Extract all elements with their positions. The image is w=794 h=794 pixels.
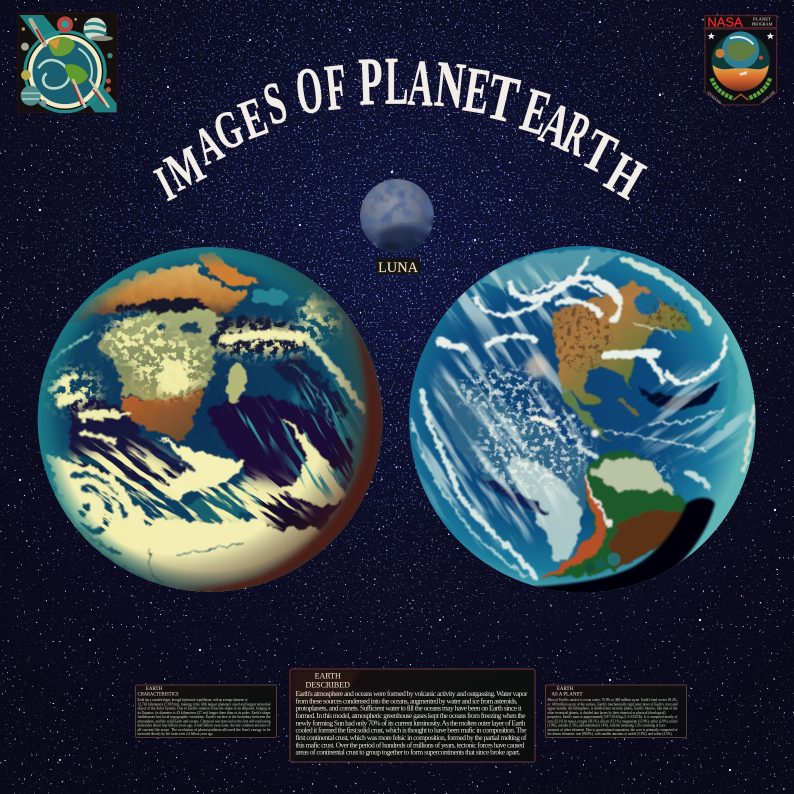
dark ocean south east [527,498,715,600]
title: images of planet earth: E [459,54,495,128]
dark limb shading [38,247,382,592]
body: earth described: protoplanets, and comets. Sufficient water to fill the oceans may have been on Earth since it [296,704,522,713]
title: images of planet earth: T [573,116,626,186]
panel: earth described [290,669,535,762]
body: earth as a planet [548,697,678,737]
body: earth characteristics: all current life arose. The evolution of photosynthesis allowed the Sun's energy to be [138,727,271,732]
heading: earth described [305,672,350,690]
body: earth characteristics: 12,742 kilometers (7,918 mi), making it the fifth largest planetary sized and largest terrestrial [138,701,271,707]
body: earth described: this mafic crust. Over the period of hundreds of millions of years, tectonic forces have caused [296,740,525,749]
globe surface [43,253,353,595]
body: earth characteristics: harvested directly by life forms over 2.4 billion years ago. [138,731,214,736]
body: earth described: areas of continental crust to group together to form supercontinents that since broke apart. [296,748,521,757]
title: images of planet earth: G [205,98,251,162]
badge header [705,15,777,29]
moon label: luna: LUNA [378,260,418,276]
moon [360,179,434,255]
badge header: PROGRAM [752,22,772,27]
rockets [31,20,108,107]
shield: ANALYSIS [706,90,722,105]
badge header: NASA [707,15,743,29]
body: earth as a planet: amounts of other elements. Due to gravitational separation, the core is primarily composed of [548,727,678,733]
title: images of planet earth: S [257,69,293,138]
right globe: americas [409,246,756,593]
title: images of planet earth [147,43,655,212]
body: earth characteristics: object of the Solar System. Due to Earth's rotation it has the shape of an ellipsoid, bulging at [138,706,271,712]
heading: earth as a planet: AS A PLANET [551,692,583,698]
ring and earth [25,32,105,112]
title: images of planet earth: A [407,47,435,121]
panel: earth characteristics [136,685,276,738]
dark swirl stripes [73,456,243,583]
shield: EXPLORE [761,89,777,104]
body: earth characteristics [138,697,271,736]
body: earth as a planet: upper mantle, the lithosphere, is divided into tectonic plates. Earth's interior, like that of the [548,706,678,712]
body: earth described: newly forming Sun had only 70% of its current luminosity. As the molten outer layer of Earth [296,718,526,727]
teal limb glow [38,247,382,592]
title: images of planet earth: M [157,134,213,202]
body: earth described: formed. In this model, atmospheric greenhouse gases kept the oceans from freezing when the [296,711,526,720]
heading: earth described: EARTH [315,672,341,680]
heading: earth as a planet: EARTH [557,687,574,692]
body: earth characteristics: its Equator; its diameter is 43 kilometers (27 mi) longer there than at its poles. Earth's shape [138,710,271,715]
title: images of planet earth: E [514,75,558,149]
title: images of planet earth: P [357,44,384,119]
body: earth described: from these sources condensed into the oceans, augmented by water and ice from asteroids, [296,696,518,705]
body: earth characteristics: furthermore has local topographic variations. Earth's surface is the boundary between the [138,714,271,719]
body: earth as a planet: properties. Earth's mass is approximately 5.97×1024 kg (1.3×1025 lb). It is composed mostly of [548,714,678,719]
badge header: PLANET [753,17,771,22]
nasa planet program badge [705,15,777,105]
title: images of planet earth: F [322,50,350,125]
heading: earth characteristics [138,687,179,698]
title: images of planet earth: H [596,140,655,211]
title: images of planet earth: A [532,89,580,161]
left mission badge [18,13,117,112]
body: earth described: cooled it formed the first solid crust, which is thought to have been mafic in composition. The [296,726,527,735]
title: images of planet earth: I [147,157,184,212]
pale texture layers [412,258,590,552]
planets [21,16,113,107]
title: images of planet earth: E [232,87,275,152]
white cloud swirls [412,260,753,577]
title: images of planet earth: L [385,43,408,119]
land masses [540,280,697,581]
heading: earth characteristics: CHARACTERISTICS [138,692,179,698]
body: earth characteristics: atmosphere, and the solid Earth and oceans. Chemical reactions led to the first self-replicating [138,718,270,724]
heading: earth characteristics: EARTH [146,687,163,692]
left globe: africa stylised [38,247,382,592]
body: earth described [296,689,528,757]
body: earth as a planet: or 149 million sq mi of the surface. Earth's mechanically rigid outer layer of Earth's crust and [548,701,678,706]
body: earth characteristics: molecules about four billion years ago. A half billion years later, the last common ancestor of [138,722,271,728]
body: earth as a planet: iron (32.1% by mass), oxygen (30.1%), silicon (15.1%), magnesium (13.9%), sulfur (2.9%), nickel [548,718,678,724]
panel: earth as a planet [546,685,686,738]
body: earth as a planet: Most of Earth's surface is ocean water: 70.8% or 360 million sq mi. Earth's land covers 29.2%, [548,697,678,703]
body: earth as a planet: (1.8%), calcium (1.5%), and aluminium (1.4%), with the remaining 1.2% consisting of trace [548,722,666,728]
title: images of planet earth: R [553,99,601,170]
body: earth described: first continental crust, which was more felsic in composition, formed by the partial melting of [296,733,527,742]
title: images of planet earth: O [292,54,327,129]
title: images of planet earth: T [480,60,525,138]
clouds and water [433,250,720,563]
body: earth as a planet: other terrestrial planets, is divided into layers by their chemical or physical (rheological) [548,710,666,716]
shield [705,29,777,105]
texture layers [48,434,317,550]
body: earth as a planet: the denser elements: iron (88.8%), with smaller amounts of nickel (5.8%), and sulfur (4.5%). [548,731,672,737]
diagonal band [19,15,117,112]
heading: earth as a planet [551,687,583,698]
title: images of planet earth: A [186,114,231,177]
body: earth described: Earth's atmosphere and oceans were formed by volcanic activity and outgassing. Water vapor [296,689,528,698]
title: images of planet earth: N [432,47,468,122]
body: earth characteristics: Earth has a rounded shape, through hydrostatic equilibrium, with an average diameter of [138,697,248,703]
heading: earth described: DESCRIBED [305,680,350,690]
cloud streaks [50,333,365,453]
